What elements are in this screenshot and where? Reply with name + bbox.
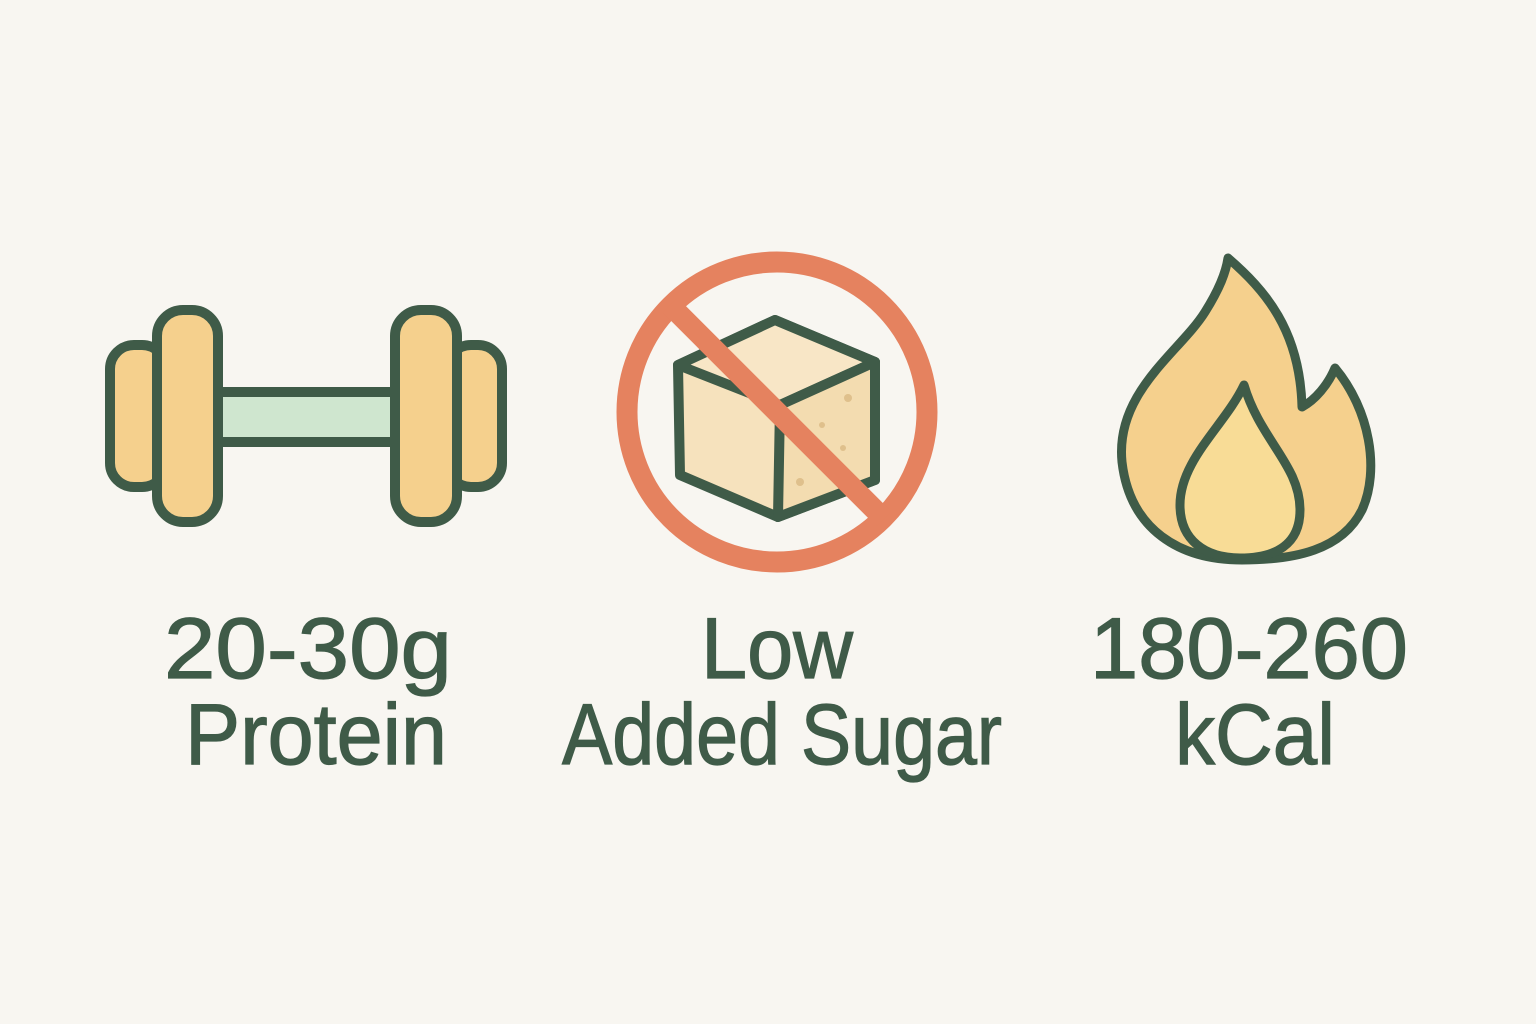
- label: low added sugar: Added Sugar: [562, 687, 1002, 783]
- label: protein: Protein: [185, 687, 447, 783]
- label: low added sugar: Low: [701, 601, 854, 697]
- icon: dumbbell: [110, 310, 502, 522]
- label: calories: 180-260: [1090, 601, 1408, 697]
- label: protein: [164, 601, 452, 783]
- label: protein: 20-30g: [164, 601, 452, 697]
- label: calories: [1090, 601, 1408, 783]
- label: low added sugar: [562, 601, 1002, 783]
- icon: sugar cube with prohibition sign: [627, 262, 927, 562]
- label: calories: kCal: [1175, 687, 1335, 783]
- icon: flame: [1121, 258, 1371, 560]
